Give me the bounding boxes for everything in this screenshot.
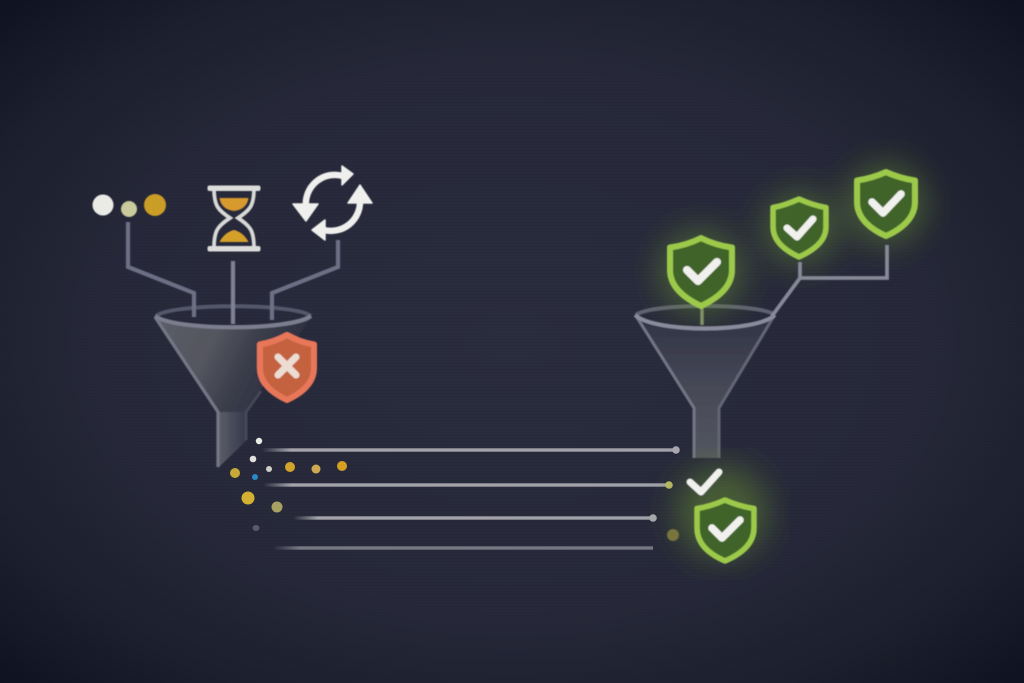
arrow: connector from dots xyxy=(128,222,194,317)
line 2 xyxy=(263,481,673,489)
line 3 xyxy=(293,514,657,522)
panel: horizontal output lines xyxy=(262,446,680,550)
dot: olive fading dot xyxy=(667,529,679,541)
icon: free check mark xyxy=(690,472,719,492)
panel: left funnel group xyxy=(92,166,372,468)
icon: green shield middle xyxy=(773,199,826,257)
particles: scattering dots xyxy=(230,438,347,531)
icon: green shield left xyxy=(670,238,732,306)
icon: three input dots xyxy=(92,194,166,217)
icon: hourglass xyxy=(208,186,260,252)
right funnel back rim xyxy=(636,306,775,315)
glow: bottom shield xyxy=(676,466,768,558)
icon: red rejected shield xyxy=(260,335,314,400)
icon: bottom green shield xyxy=(697,500,754,561)
arrow: connector from upper shields xyxy=(772,245,887,316)
icon: right funnel body xyxy=(635,315,775,458)
icon: refresh arrows xyxy=(293,166,372,240)
panel: right funnel group xyxy=(635,164,926,458)
left funnel back rim xyxy=(156,306,311,316)
arrow: connector from hourglass xyxy=(231,261,235,324)
line 1 xyxy=(262,446,680,454)
icon: left funnel body xyxy=(155,316,311,468)
glow: right shields xyxy=(659,164,926,314)
arrow: stem under first shield xyxy=(700,308,704,325)
icon: green shield right xyxy=(857,172,915,236)
line 4 xyxy=(273,546,653,550)
panel: bottom validated shield group xyxy=(667,466,768,561)
arrow: connector from refresh xyxy=(272,240,338,320)
